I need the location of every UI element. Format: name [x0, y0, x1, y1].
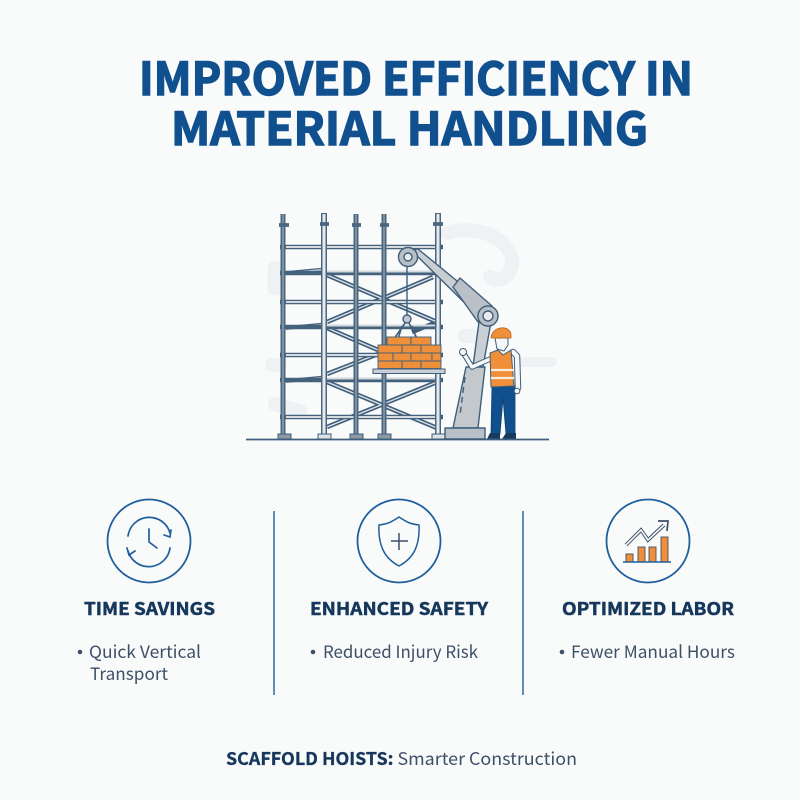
icon: growth chart	[606, 500, 690, 582]
column: optimized labor	[560, 500, 735, 663]
bullet	[78, 638, 201, 685]
worker left arm	[464, 354, 490, 367]
worker	[460, 328, 520, 439]
platform	[373, 369, 445, 374]
worker boots	[487, 433, 516, 439]
brace highlights	[286, 270, 437, 428]
ground line	[246, 438, 549, 440]
column: enhanced safety	[310, 500, 489, 663]
hard hat	[491, 328, 511, 338]
brick load	[378, 337, 441, 368]
heading: TIME SAVINGS	[84, 596, 215, 621]
worker right arm	[513, 352, 518, 388]
bullet: Transport	[90, 660, 169, 685]
bullet: Quick Vertical	[89, 638, 201, 663]
bullet: Reduced Injury Risk	[323, 638, 479, 663]
icon: clock with cycle arrows	[108, 500, 190, 582]
title: MATERIAL HANDLING	[171, 93, 648, 158]
hands	[460, 348, 466, 356]
column: time savings	[78, 500, 215, 685]
worker legs	[491, 386, 515, 434]
column dividers	[274, 511, 523, 695]
safety vest	[490, 350, 514, 387]
head	[495, 338, 508, 351]
title: IMPROVED EFFICIENCY IN	[139, 43, 693, 108]
heading: OPTIMIZED LABOR	[562, 596, 734, 621]
heading: ENHANCED SAFETY	[310, 596, 489, 621]
scaffold horizontal ledgers	[280, 247, 443, 417]
scaffold base plates	[278, 434, 445, 439]
footer tagline: SCAFFOLD HOISTS: Smarter Construction	[226, 746, 577, 771]
scaffold diagonal braces	[286, 270, 437, 428]
icon: shield with plus	[358, 500, 440, 582]
background watermark	[272, 230, 552, 411]
scaffold illustration	[246, 213, 549, 440]
hoist arm	[398, 248, 498, 439]
title	[139, 43, 693, 158]
scaffold poles	[279, 213, 443, 436]
bullet: Fewer Manual Hours	[571, 638, 735, 663]
hoist cable and hook	[394, 267, 420, 344]
